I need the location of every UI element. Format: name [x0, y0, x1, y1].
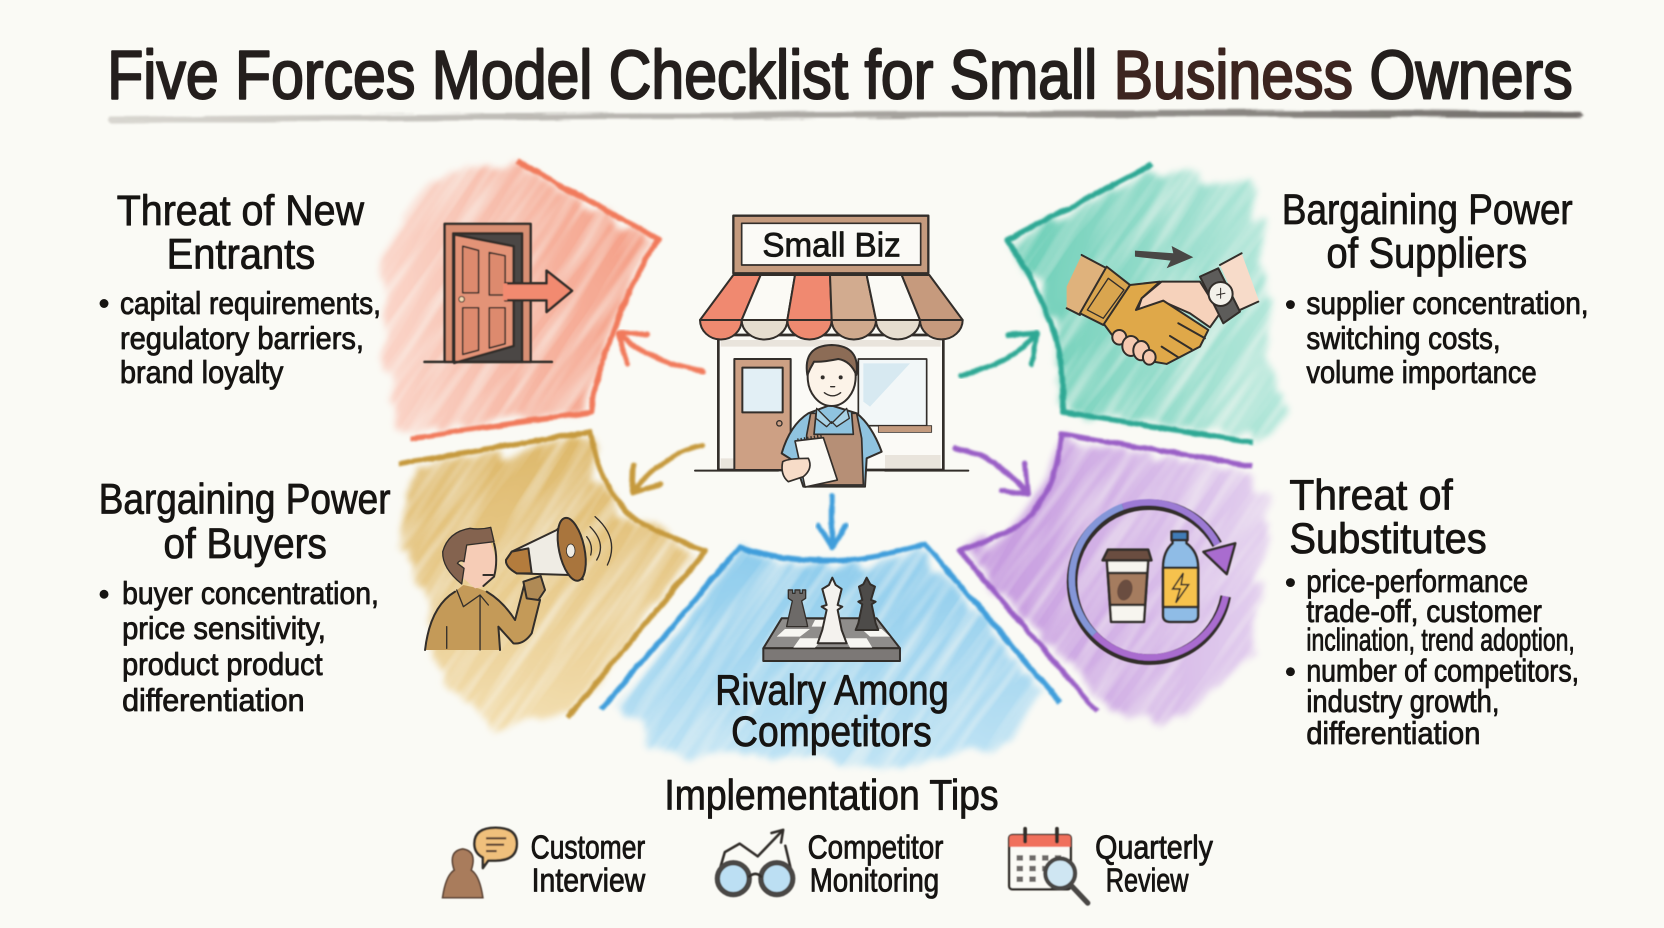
bullet list: industry growth, — [1306, 684, 1499, 719]
heading: Threat of New — [117, 187, 364, 234]
icon: person with speech bubble — [443, 828, 517, 898]
heading — [1289, 471, 1487, 562]
heading: Bargaining Power — [99, 476, 391, 523]
bullet list: price-performance — [1306, 564, 1528, 599]
icon: glasses with trend line — [717, 830, 793, 895]
awning — [700, 275, 963, 340]
bullet list — [1286, 564, 1579, 751]
bullet list: brand loyalty — [120, 355, 284, 390]
tip: competitor monitoring: Monitoring — [810, 861, 939, 898]
sign: Small Biz — [762, 227, 901, 265]
bullet list: differentiation — [1306, 716, 1480, 751]
edge: teal — [1007, 164, 1253, 443]
tip: quarterly review: Review — [1106, 861, 1189, 898]
bullet list: trade-off, customer — [1306, 594, 1542, 629]
edge: red — [412, 161, 658, 438]
sign — [733, 216, 928, 273]
heading: of Suppliers — [1327, 229, 1527, 276]
heading — [99, 476, 391, 567]
bullet list: switching costs, — [1306, 321, 1501, 356]
bullet list — [100, 286, 381, 390]
bullet list: buyer concentration, — [122, 576, 379, 611]
arrow: to rivalry — [818, 497, 846, 548]
edge: blue — [602, 543, 1060, 709]
arrow: to suppliers — [960, 333, 1037, 375]
heading: Competitors — [731, 708, 932, 755]
tip: customer interview: Interview — [532, 861, 645, 898]
panel: threat of new entrants — [100, 41, 776, 557]
tip: competitor monitoring — [717, 828, 943, 898]
heading — [117, 187, 364, 277]
icon: open door with arrow — [425, 224, 572, 363]
bullet list: inclination, trend adoption, — [1306, 623, 1575, 658]
bullet list: regulatory barriers, — [120, 321, 364, 356]
heading: Threat of — [1289, 471, 1453, 518]
panel: bargaining power of buyers — [99, 297, 835, 870]
tip: customer interview — [443, 828, 645, 898]
bullet list — [1286, 286, 1589, 390]
wash: purple — [833, 298, 1404, 867]
heading: Implementation Tips — [664, 772, 999, 819]
wash: blue — [519, 350, 1147, 928]
wash: yellow — [261, 297, 835, 870]
panel: bargaining power of suppliers — [890, 43, 1589, 566]
heading: Rivalry Among — [715, 667, 949, 714]
implementation tips — [443, 772, 1213, 903]
tip: competitor monitoring: Competitor — [808, 828, 943, 865]
heading: of Buyers — [163, 520, 327, 567]
tip: quarterly review: Quarterly — [1095, 828, 1213, 865]
tip: customer interview: Customer — [531, 828, 645, 865]
bullet list: supplier concentration, — [1306, 286, 1589, 321]
bullet list: capital requirements, — [120, 286, 381, 321]
building wall — [718, 335, 943, 470]
wash: red — [260, 41, 776, 557]
wall shading — [721, 340, 941, 468]
bullet list: differentiation — [122, 683, 305, 718]
arrow: to new entrants — [618, 333, 703, 371]
heading — [715, 667, 949, 755]
wash: teal — [890, 43, 1413, 566]
heading — [1282, 186, 1573, 276]
door — [734, 359, 791, 470]
bullet list: number of competitors, — [1306, 653, 1579, 688]
icon: handshake — [1067, 246, 1259, 365]
panel: rivalry among competitors — [519, 350, 1147, 928]
window — [858, 359, 932, 432]
icon: person with megaphone — [425, 515, 612, 650]
panel: threat of substitutes — [833, 298, 1579, 867]
arrow: to substitutes — [955, 448, 1028, 495]
tip: quarterly review — [1009, 828, 1213, 903]
floor lines — [695, 468, 968, 474]
heading: Substitutes — [1289, 515, 1487, 562]
edge: yellow — [398, 432, 706, 717]
storefront: small biz shop with owner — [695, 216, 968, 487]
icon: calendar with magnifier — [1009, 829, 1088, 903]
owner — [782, 345, 882, 487]
icon: chess pieces on a board — [763, 578, 900, 661]
bullet list: product product — [122, 647, 323, 682]
title underline — [111, 114, 1579, 120]
title: Five Forces Model Checklist for Small Business Owners — [107, 37, 1573, 114]
bullet list: volume importance — [1306, 355, 1537, 390]
icon: swap cycle with coffee and energy drink — [1072, 502, 1235, 660]
bullet list — [100, 576, 379, 718]
bullet list: price sensitivity, — [122, 611, 326, 646]
arrow: to buyers — [632, 446, 703, 492]
heading: Bargaining Power — [1282, 186, 1573, 233]
edge: purple — [959, 434, 1252, 712]
heading: Entrants — [167, 230, 315, 277]
